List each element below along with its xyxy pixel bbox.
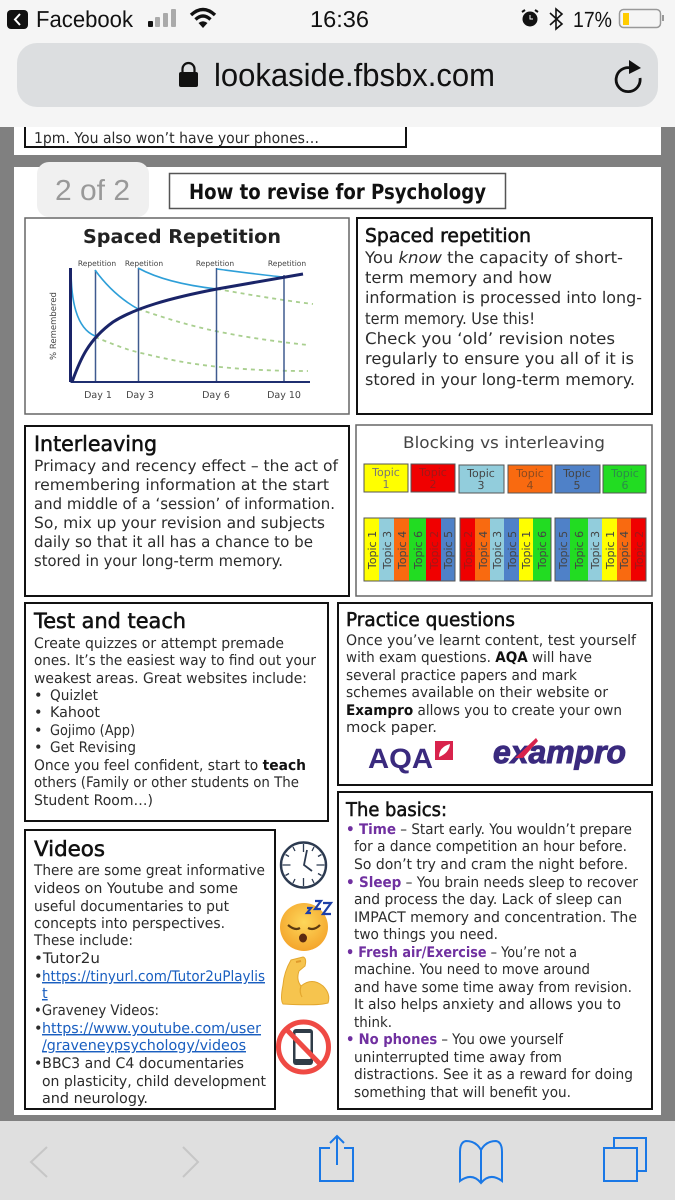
icon: share (320, 1136, 353, 1181)
interleaved strips: Topic 2 (428, 531, 441, 570)
panel: test and teach: weakest areas. Great websites include: (34, 671, 307, 687)
panel: practice questions: Exampro allows you to create your own (346, 703, 622, 719)
icon: sleeping face (280, 901, 331, 951)
panel: the basics: • No phones – You owe yourself (346, 1032, 564, 1048)
icon: back to Facebook (7, 10, 28, 29)
panel: test and teach: Kahoot (50, 705, 100, 721)
panel: spaced repetition text: term memory. Use this! (365, 309, 535, 328)
interleaved strips: Topic 4 (396, 531, 409, 570)
icon: clock (281, 842, 326, 888)
panel: interleaving text: daily so that it all has a chance to be (34, 533, 313, 551)
interleaved strips: Topic 3 (491, 531, 504, 570)
panel: practice questions: with exam questions. AQA will have (346, 650, 592, 666)
icon: back (31, 1147, 47, 1177)
panel: spaced repetition text: stored in your long-term memory. (365, 370, 635, 389)
panel: spaced repetition text: Spaced repetition (365, 225, 531, 247)
icon: signal bars (148, 9, 176, 27)
topic blocks: 4 (526, 479, 534, 492)
interleaved strips: Topic 6 (536, 531, 549, 570)
panel: videos (25, 830, 275, 1109)
previous page fragment (14, 118, 661, 155)
logo: AQA (368, 741, 453, 774)
panel: interleaving text: Primacy and recency effect – the act of (34, 457, 339, 475)
panel: test and teach: Gojimo (App) (50, 723, 135, 739)
panel: the basics: and process the day. Lack of sleep can (354, 892, 622, 908)
icon: battery (620, 10, 664, 28)
panel: videos: useful documentaries to put (34, 899, 229, 915)
interleaved strips: Topic 3 (589, 531, 602, 570)
icon: forward (183, 1147, 198, 1177)
address bar (17, 43, 658, 107)
interleaved strips: Topic 2 (462, 531, 475, 570)
interleaved strips: Topic 5 (442, 531, 455, 570)
interleaved strips: Topic 5 (557, 531, 570, 570)
panel: test and teach: ones. It’s the easiest way to find out your (34, 653, 316, 669)
title: How to revise for Psychology (189, 180, 486, 204)
panel: the basics: distractions. See it as a reward for doing (354, 1067, 633, 1083)
topic blocks: 5 (574, 479, 580, 492)
panel: practice questions: schemes available on their website or (346, 685, 608, 701)
panel: spaced repetition text: regularly to ensure you all of it is (365, 349, 634, 368)
line chart: Repetition (268, 259, 306, 268)
icon: reload (616, 60, 641, 92)
title (170, 174, 506, 208)
panel: interleaving text: So, mix up your revision and subjects (34, 514, 325, 532)
line chart: Repetition (78, 259, 116, 268)
panel: practice questions: several practice papers and mark (346, 668, 578, 684)
panel: the basics: and have some time away from revision. (354, 980, 632, 996)
panel: the basics: IMPACT memory and concentration. The (354, 910, 637, 926)
interleaved strips (364, 518, 646, 581)
line chart: Day 1 (84, 390, 112, 401)
panel: videos: •Graveney Videos: (34, 1003, 159, 1019)
panel: videos: /graveneypsychology/videos (42, 1038, 246, 1054)
icon: lock (179, 63, 198, 87)
interleaved strips: Topic 5 (506, 531, 519, 570)
panel: videos: •BBC3 and C4 documentaries (34, 1056, 244, 1072)
panel: videos: on plasticity, child development (42, 1074, 266, 1090)
panel: the basics: • Fresh air/Exercise – You’re not a (346, 945, 577, 961)
panel: videos: t (42, 986, 48, 1002)
interleaved strips: Topic 3 (381, 531, 394, 570)
status app name: Facebook (36, 6, 133, 32)
browser bottom toolbar (0, 1121, 675, 1200)
panel: test and teach: Quizlet (50, 688, 98, 704)
panel: practice questions: Practice questions (346, 609, 515, 631)
icon: alarm (522, 10, 538, 26)
interleaved strips: Topic 4 (618, 531, 631, 570)
panel: test and teach: Get Revising (50, 740, 136, 756)
topic blocks: Topic (418, 466, 447, 479)
panel: spaced repetition text: information is processed into long- (365, 288, 642, 307)
panel: interleaving text: stored in your long-term memory. (34, 552, 283, 570)
icon: wifi (191, 10, 215, 28)
panel: the basics: So don’t try and cram the night before. (354, 857, 628, 873)
icon: bookmarks (460, 1141, 502, 1183)
topic blocks: 1 (382, 478, 390, 491)
panel: videos: •Tutor2u (34, 951, 100, 967)
panel: spaced repetition chart (25, 218, 349, 414)
panel: test and teach: • (34, 740, 43, 756)
panel: the basics: for a dance competition an hour before. (354, 839, 627, 855)
panel: videos: • (34, 969, 43, 985)
interleaved strips: Topic 4 (477, 531, 490, 570)
panel: interleaving text: remembering information at the start (34, 476, 329, 494)
line chart: Day 3 (126, 390, 154, 401)
panel: blocking vs interleaving (356, 425, 652, 596)
panel: videos: concepts into perspectives. (34, 916, 225, 932)
panel: videos: Videos (34, 837, 105, 861)
icon: tabs (604, 1138, 646, 1181)
topic blocks: 3 (478, 479, 484, 492)
line chart: % Remembered (49, 292, 59, 360)
panel: practice questions: mock paper. (346, 720, 437, 736)
page badge: 2 of 2 (55, 175, 130, 207)
line chart: Day 10 (267, 390, 301, 401)
panel: test and teach (25, 603, 328, 821)
line chart: Repetition (125, 259, 163, 268)
panel: the basics: • Sleep – You brain needs sleep to recover (346, 875, 638, 891)
panel: the basics: The basics: (345, 799, 447, 821)
panel: test and teach: Once you feel confident, start to teach (34, 758, 306, 774)
url: lookaside.fbsbx.com (214, 57, 495, 93)
panel: test and teach: • (34, 723, 43, 739)
panel: the basics: uninterrupted time away from (354, 1050, 562, 1066)
logo: Exampro: exampro (493, 734, 626, 770)
panel: blocking vs interleaving: Blocking vs interleaving (403, 433, 605, 452)
topic blocks: Topic (466, 467, 495, 480)
interleaved strips: Topic 6 (412, 531, 425, 570)
panel: the basics: think. (354, 1015, 392, 1031)
panel: spaced repetition text: term memory and how (365, 268, 552, 287)
interleaved strips: Topic 1 (604, 531, 617, 570)
icon: flexed arm (282, 957, 329, 1005)
panel: test and teach: Test and teach (33, 609, 186, 633)
page badge (37, 162, 149, 217)
line chart: Day 6 (202, 390, 230, 401)
panel: videos: and neurology. (42, 1091, 148, 1107)
panel: the basics: something that will benefit you. (354, 1085, 571, 1101)
topic blocks: Topic (515, 467, 544, 480)
panel: videos: • (34, 1021, 43, 1037)
status time: 16:36 (310, 6, 369, 32)
panel: spaced repetition text: You know the capacity of short- (364, 248, 623, 267)
battery percent: 17% (573, 7, 612, 32)
previous page fragment: 1pm. You also won’t have your phones… (34, 129, 319, 147)
topic blocks: 2 (430, 478, 436, 491)
panel: videos: https://tinyurl.com/Tutor2uPlaylis (42, 969, 265, 985)
panel: test and teach: • (34, 688, 43, 704)
panel: spaced repetition text (357, 218, 652, 414)
panel: practice questions (338, 603, 652, 785)
panel: test and teach: Create quizzes or attempt premade (34, 636, 284, 652)
logo: AQA: AQA (368, 743, 433, 774)
icon: no phones (278, 1022, 328, 1072)
topic blocks: Topic (562, 467, 591, 480)
panel: spaced repetition text: Check you ‘old’ revision notes (365, 329, 615, 348)
panel: interleaving text (25, 426, 349, 596)
line chart: Repetition (196, 259, 234, 268)
panel: the basics: machine. You need to move around (354, 962, 590, 978)
main page panel (14, 167, 661, 1115)
interleaved strips: Topic 1 (520, 531, 533, 570)
topic blocks (364, 464, 646, 493)
browser top bar (0, 0, 675, 127)
chart title: Spaced Repetition (83, 226, 281, 248)
panel: practice questions: Once you’ve learnt content, test yourself (346, 633, 637, 649)
interleaved strips: Topic 1 (366, 531, 379, 570)
panel: the basics: It also helps anxiety and allows you to (354, 997, 621, 1013)
panel: videos: These include: (33, 933, 133, 949)
panel: videos: There are some great informative (33, 863, 265, 879)
topic blocks: Topic (610, 467, 639, 480)
interleaved strips: Topic 6 (573, 531, 586, 570)
panel: interleaving text: and middle of a ‘session’ of information. (34, 495, 335, 513)
panel: test and teach: others (Family or other students on The (34, 775, 299, 791)
topic blocks: 6 (622, 479, 628, 492)
panel: videos: https://www.youtube.com/user (42, 1021, 261, 1037)
panel: test and teach: • (34, 705, 43, 721)
panel: the basics: two things you need. (354, 927, 498, 943)
panel: test and teach: Student Room…) (34, 793, 153, 809)
line chart (49, 259, 313, 401)
topic blocks: Topic (371, 466, 400, 479)
icon: bluetooth (550, 9, 562, 29)
panel: videos: videos on Youtube and some (34, 881, 238, 897)
panel: the basics: • Time – Start early. You wouldn’t prepare (346, 822, 632, 838)
panel: the basics (338, 792, 652, 1109)
interleaved strips: Topic 2 (633, 531, 646, 570)
panel: interleaving text: Interleaving (34, 432, 157, 456)
